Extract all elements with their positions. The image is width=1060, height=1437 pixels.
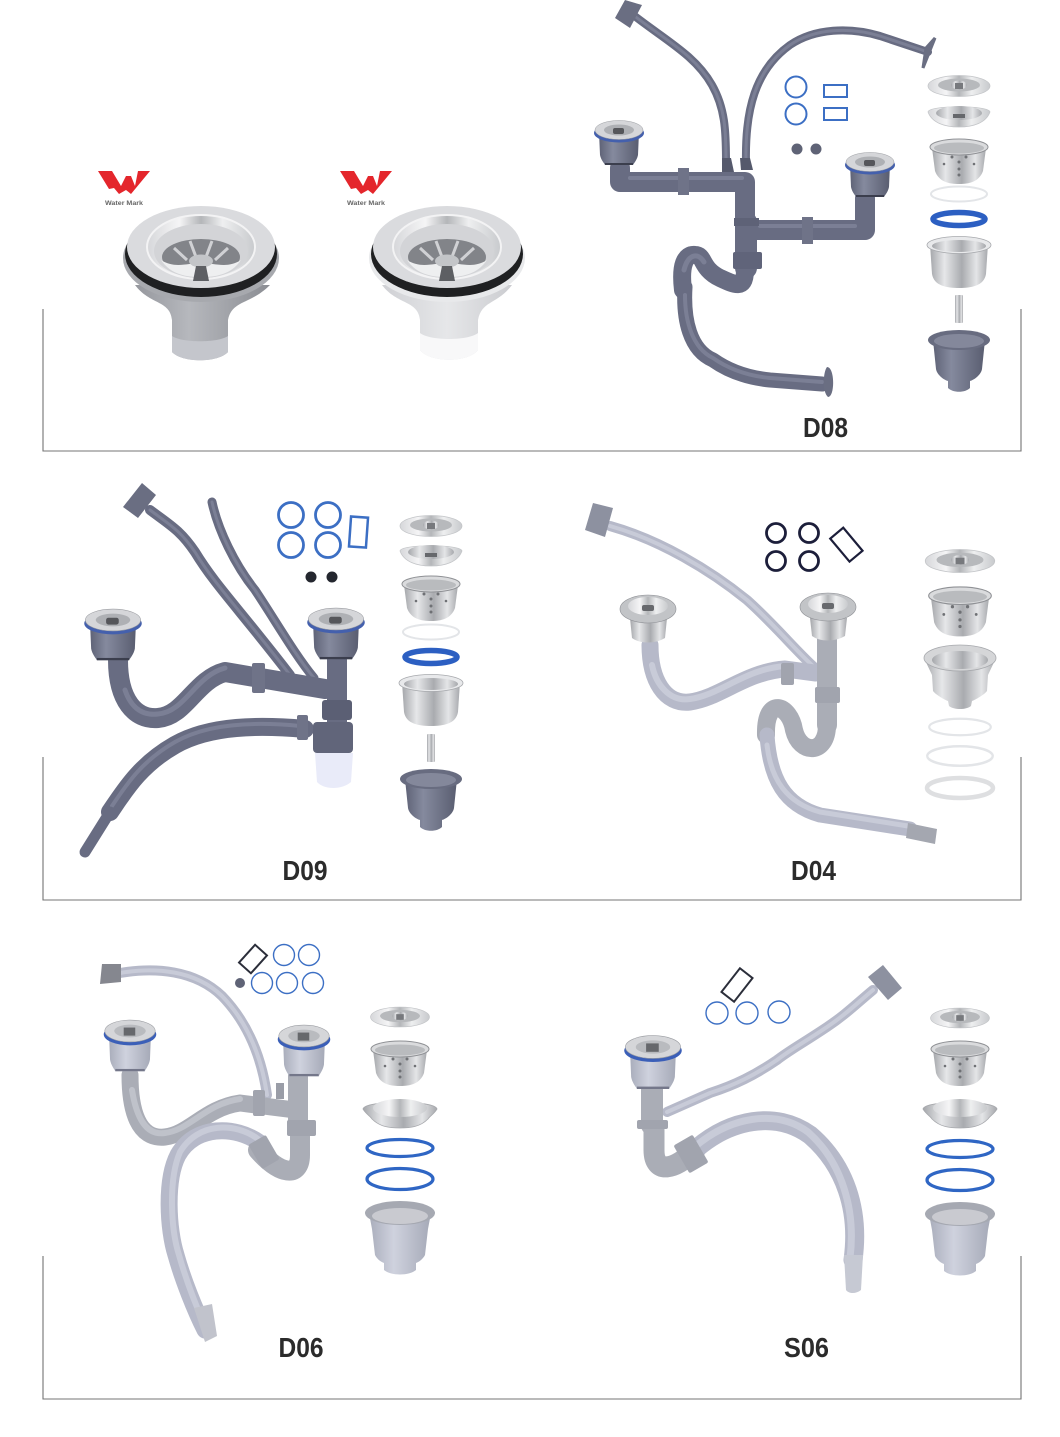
strainer: right: [800, 593, 856, 640]
drain pipes: [85, 655, 353, 852]
basket: left: [594, 120, 644, 165]
label: D04: D04: [791, 855, 836, 886]
basket: [624, 1036, 682, 1089]
drain pipes: [650, 638, 937, 844]
parts stack: D06: [363, 1007, 437, 1274]
panel frame: D06 and S06: [43, 1256, 1021, 1399]
product: D09 drain assembly: [84, 483, 365, 852]
overflow hose: [100, 964, 267, 1095]
overflow hoses: [123, 483, 314, 678]
parts stack: D09: [399, 516, 463, 831]
gaskets: D06: [235, 944, 324, 994]
basket: right: [845, 152, 895, 197]
watermark logo: right strainer: [340, 171, 392, 207]
steel basket strainer: [123, 206, 279, 360]
label: D09: D09: [282, 855, 328, 886]
white basket strainer: [369, 206, 525, 360]
overflow hose: [667, 965, 902, 1112]
label: D06: D06: [278, 1332, 324, 1363]
drain pipes: [620, 158, 865, 397]
gaskets: D08: [786, 76, 847, 154]
product: D04 drain assembly: [585, 503, 937, 844]
panel frame: D09 and D04: [43, 757, 1021, 900]
label: D08: D08: [803, 412, 848, 443]
strainer: left: [620, 595, 676, 642]
drain pipes: [130, 1066, 316, 1342]
gaskets: S06: [706, 968, 790, 1024]
watermark logo: left strainer: Water Mark: [105, 201, 144, 207]
basket: left: [84, 609, 142, 660]
parts stack: S06: [923, 1008, 997, 1276]
drain pipes: [637, 1088, 863, 1293]
overflow hoses: [615, 0, 935, 162]
gaskets: D09: [278, 502, 368, 582]
product: S06 drain assembly: [624, 965, 902, 1293]
parts stack: D04: [924, 549, 996, 798]
overflow hose: [585, 503, 815, 668]
parts stack: D08: [927, 76, 991, 392]
product: D06 drain assembly: [100, 964, 330, 1342]
basket: right: [307, 608, 365, 659]
watermark logo: left strainer: [98, 171, 150, 207]
basket: right: [278, 1025, 330, 1076]
gaskets: D04: [766, 524, 863, 570]
panel frame: D08: [43, 309, 1021, 451]
label: S06: S06: [784, 1332, 829, 1363]
watermark logo: right strainer: Water Mark: [347, 201, 386, 207]
product: D08 drain assembly: [594, 0, 935, 397]
basket: left: [104, 1020, 156, 1071]
